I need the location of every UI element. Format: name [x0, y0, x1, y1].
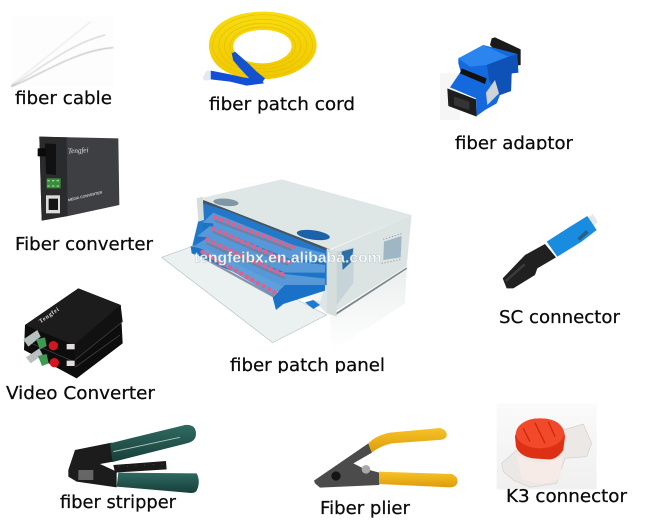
item: fiber stripper	[60, 425, 199, 513]
green terminals	[36, 337, 47, 349]
icon: yellow handled plier	[314, 428, 458, 488]
white stickers	[67, 344, 75, 349]
item: fiber cable	[11, 17, 113, 109]
item: fiber patch cord	[203, 12, 355, 115]
icon: yellow coiled patch cord	[203, 12, 317, 86]
label: fiber adaptor: fiber adaptor	[455, 133, 574, 154]
reflection	[330, 270, 407, 352]
item: fiber adaptor	[440, 37, 574, 154]
tray 2	[197, 226, 325, 273]
tray 1	[202, 213, 325, 261]
label: fiber cable: fiber cable	[15, 88, 112, 109]
label: SC connector: SC connector	[499, 307, 621, 328]
brand text: Tengfei	[38, 307, 61, 325]
label: fiber patch panel: fiber patch panel	[230, 355, 385, 376]
item: fiber patch panel	[162, 179, 412, 376]
right side	[332, 215, 412, 312]
product text: MEDIA CONVERTER	[68, 190, 103, 202]
icon: fiber strands	[11, 17, 113, 87]
label: Video Converter: Video Converter	[6, 383, 156, 404]
icon: blue SC adaptor	[440, 37, 521, 120]
label: K3 connector: K3 connector	[506, 486, 628, 507]
item: video converter	[6, 288, 156, 404]
interior	[192, 200, 330, 303]
cable slots	[296, 228, 330, 242]
icon: media converter box	[38, 137, 119, 221]
icon: SC fast connector	[503, 214, 598, 288]
watermark: tengfeibx.en.alibaba.com	[194, 251, 382, 267]
label: Fiber plier: Fiber plier	[320, 498, 411, 519]
front rack ear	[197, 197, 337, 317]
connector: upper blue SC plug	[232, 52, 265, 83]
item: K3 connector	[497, 403, 628, 507]
item: fiber plier	[314, 428, 458, 519]
label: Fiber converter: Fiber converter	[15, 234, 154, 255]
tray 3	[192, 238, 325, 288]
label: fiber stripper: fiber stripper	[60, 492, 177, 513]
item: SC connector	[499, 214, 621, 328]
label: fiber patch cord: fiber patch cord	[209, 94, 355, 115]
icon: green handled stripper	[68, 425, 199, 493]
flap	[162, 246, 327, 343]
brand text: Tengfei	[68, 145, 89, 155]
BNC connectors	[23, 330, 43, 363]
fiber ports	[203, 218, 293, 293]
red ports	[49, 341, 58, 350]
tray 4	[273, 285, 325, 310]
connector: lower blue SC plug	[211, 71, 264, 86]
icon: stacked video converters	[23, 288, 123, 378]
fiber port bases	[203, 221, 292, 297]
icon: rack patch panel	[162, 179, 412, 352]
item: fiber converter	[15, 137, 154, 255]
top cover	[200, 179, 412, 249]
icon: K3 red gel connector	[497, 403, 597, 489]
